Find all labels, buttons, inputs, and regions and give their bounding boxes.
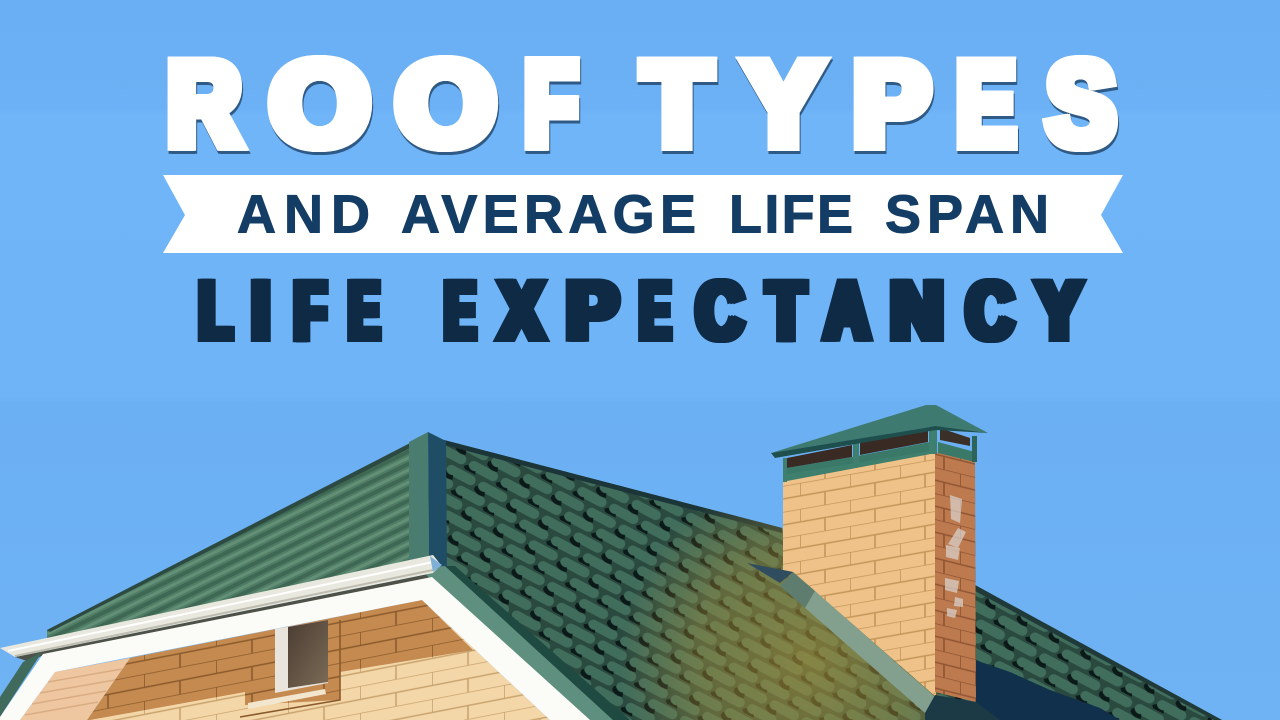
- valley flashing beside chimney: [747, 563, 1000, 720]
- ribbon banner: [163, 175, 1123, 253]
- heading: life expectancy: E: [445, 266, 475, 356]
- wall: brick gable: [87, 600, 550, 720]
- subtitle: and average life span: AND: [237, 184, 370, 244]
- title: ROOF TYPES: O: [396, 37, 495, 171]
- heading: life expectancy: E: [640, 266, 670, 356]
- title: ROOF TYPES: P: [854, 37, 930, 171]
- roof: main tiled face: [444, 440, 945, 720]
- title: ROOF TYPES: Y: [745, 37, 822, 171]
- subtitle: and average life span: LIFE: [729, 184, 853, 244]
- subtitle: and average life span: AVERAGE: [401, 184, 696, 244]
- heading: life expectancy: E: [349, 266, 379, 356]
- heading: life expectancy: L: [199, 266, 231, 356]
- title: ROOF TYPES: T: [643, 37, 711, 171]
- title: ROOF TYPES: [168, 37, 1115, 171]
- roof: left hip face: [47, 442, 412, 642]
- heading: life expectancy: N: [891, 266, 943, 356]
- wall: soffit: [20, 658, 130, 720]
- chimney cap: [771, 405, 988, 482]
- shadow under gutter: [15, 573, 433, 662]
- heading: life expectancy: T: [768, 266, 804, 356]
- chimney front face: [783, 452, 936, 697]
- title: ROOF TYPES: R: [168, 37, 241, 171]
- white gutter: [0, 555, 442, 657]
- title: ROOF TYPES: O: [270, 37, 369, 171]
- heading: life expectancy: X: [500, 266, 543, 356]
- title: ROOF TYPES: F: [525, 37, 577, 171]
- house photo illustration: [0, 405, 1222, 720]
- heading: life expectancy: C: [697, 266, 743, 356]
- heading: life expectancy: I: [252, 266, 269, 356]
- subtitle: and average life span: SPAN: [885, 184, 1049, 244]
- window: [240, 620, 340, 717]
- green roof edge trims: [0, 566, 630, 720]
- heading: life expectancy: C: [967, 266, 1013, 356]
- title: ROOF TYPES: S: [1047, 37, 1115, 171]
- heading: life expectancy: P: [567, 266, 618, 356]
- roof: hip ridge strips: [409, 432, 447, 575]
- chimney: [771, 405, 988, 702]
- heading: life expectancy: A: [825, 266, 869, 356]
- white fascia board: [0, 577, 590, 720]
- chimney side face: [935, 452, 976, 702]
- heading: life expectancy: F: [294, 266, 326, 356]
- heading: life expectancy: Y: [1037, 266, 1081, 356]
- title: ROOF TYPES: E: [957, 37, 1015, 171]
- roof: right tiled section: [930, 585, 1222, 720]
